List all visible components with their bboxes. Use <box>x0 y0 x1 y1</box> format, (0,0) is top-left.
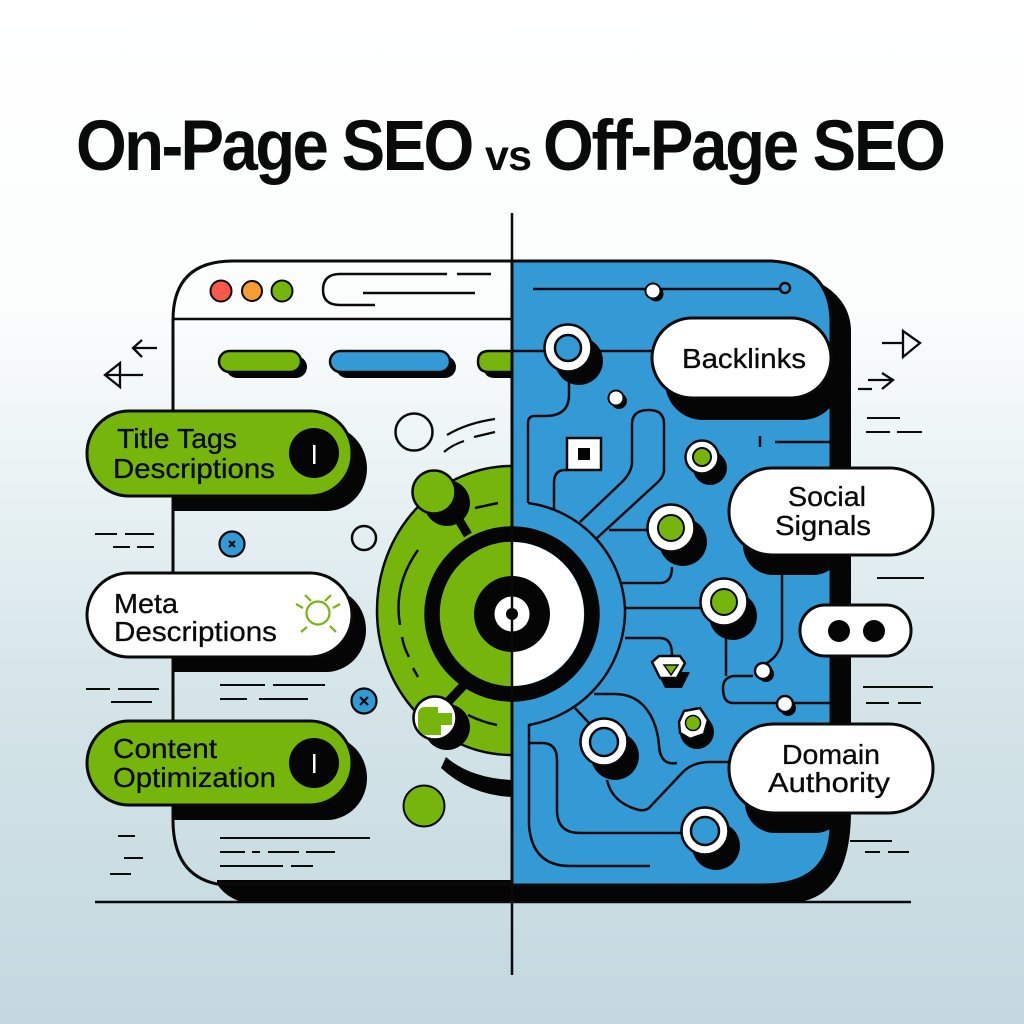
small dashes near circle <box>444 419 495 452</box>
side dash marks <box>86 418 933 874</box>
icon: black dot <box>289 738 339 788</box>
green node top <box>412 470 470 535</box>
title: On-Page SEO <box>76 107 474 186</box>
nav pill green <box>219 351 307 378</box>
title: Off-Page SEO <box>543 107 946 186</box>
node: small white lower <box>777 696 796 716</box>
node: small white right <box>755 663 774 682</box>
icon: green window dot <box>272 280 292 302</box>
text lines in left panel <box>220 685 370 866</box>
small outline circle <box>352 526 376 550</box>
nav pill blue <box>330 351 456 378</box>
panel: off-page blue side <box>512 261 831 885</box>
icon: green sun <box>296 595 340 632</box>
green ring half <box>377 466 512 797</box>
pill: Domain Authority: Domain <box>782 739 880 770</box>
center divider <box>511 213 513 975</box>
pill: Title Tags Descriptions: Title Tags <box>117 423 237 454</box>
pill: Domain Authority: Authority <box>768 767 890 798</box>
pill: Content Optimization <box>87 721 367 820</box>
pill: Social Signals: Social <box>788 481 866 512</box>
green dot bottom <box>404 786 444 826</box>
pill: Social Signals: Signals <box>775 510 871 541</box>
node: blue ring lower <box>580 718 639 780</box>
arrows right <box>858 331 920 389</box>
pill: Meta Descriptions: Meta <box>114 588 179 619</box>
pill: Content Optimization: Content <box>113 733 217 764</box>
node: hexagon chip <box>679 708 714 749</box>
title <box>76 107 946 186</box>
pill: Title Tags Descriptions <box>87 411 367 511</box>
address bar <box>323 274 491 305</box>
node: blue ring bottom <box>682 808 740 870</box>
arrows left <box>105 340 157 387</box>
node: small white <box>608 390 627 409</box>
target rings <box>432 534 592 694</box>
title: vs <box>485 132 532 180</box>
pill: Backlinks <box>652 318 840 420</box>
icon: red window dot <box>210 280 232 302</box>
node: top ring <box>544 324 603 385</box>
node: square <box>567 438 601 470</box>
pill: Content Optimization: Optimization <box>113 762 276 793</box>
node: green 3 <box>700 578 757 640</box>
panel: on-page browser <box>173 261 512 884</box>
baseline <box>95 901 911 903</box>
icon: blue x dot lower <box>352 688 376 714</box>
pill: Social Signals <box>729 468 933 575</box>
pill: Meta Descriptions <box>87 573 366 672</box>
node: green 1 <box>686 440 727 485</box>
pill: Meta Descriptions: Descriptions <box>114 616 277 647</box>
pill: Title Tags Descriptions: Descriptions <box>113 453 275 484</box>
black arc below ring <box>441 757 512 797</box>
icon: orange window dot <box>242 281 262 301</box>
panel: window shadow band <box>217 283 851 903</box>
pill: Backlinks: Backlinks <box>682 343 806 374</box>
icon: blue x dot <box>220 532 244 556</box>
circle outline <box>396 414 432 450</box>
node: green 2 <box>648 504 707 566</box>
icon: black dot <box>289 428 339 478</box>
node: top slider <box>646 284 664 302</box>
blue panel nodes <box>544 324 796 870</box>
pill: toggle dots <box>800 605 911 656</box>
white node bottom with green shape <box>414 685 470 750</box>
node: triangle chip <box>652 656 690 688</box>
nav pill green partial <box>478 351 512 378</box>
circuit lines <box>512 351 831 866</box>
pill: Domain Authority <box>729 724 933 833</box>
node: line end <box>780 283 790 293</box>
